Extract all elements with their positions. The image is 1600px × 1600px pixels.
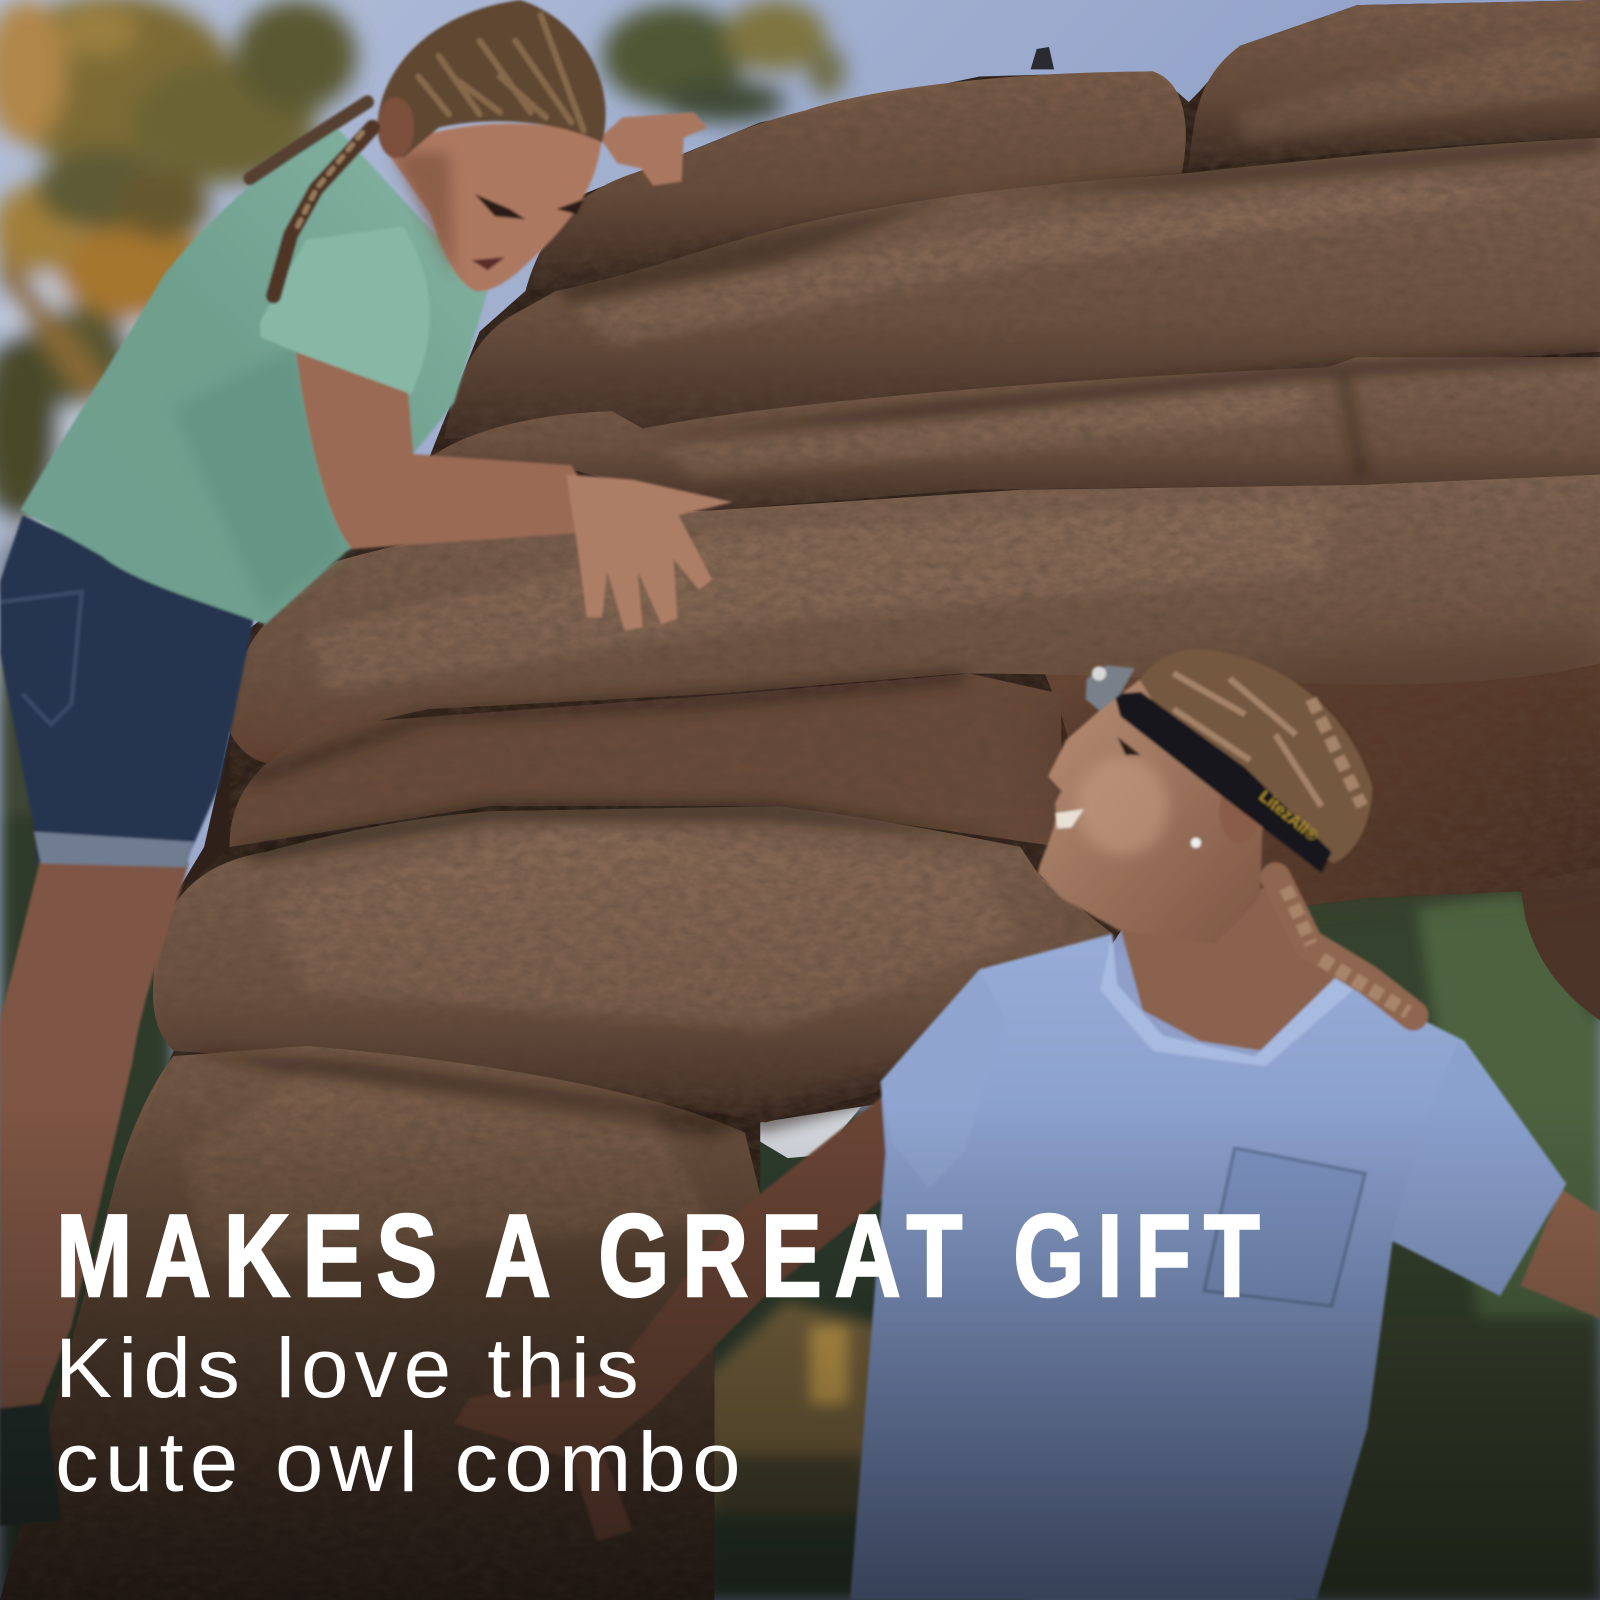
shoe <box>0 1403 61 1526</box>
headlamp <box>1086 665 1135 711</box>
shorts pocket seam <box>0 592 82 724</box>
warm shaded palm area <box>1041 633 1600 918</box>
heading: MAKES A GREAT GIFT <box>56 1190 1272 1321</box>
background: blurred house with warm light <box>704 1301 903 1515</box>
girl on the left climbing <box>0 0 733 1526</box>
braids <box>250 102 372 296</box>
ear <box>378 97 414 158</box>
hair highlights <box>418 15 584 131</box>
legs <box>0 857 189 1469</box>
fourth finger <box>227 474 1600 765</box>
small dark knob on top of the stone <box>1031 47 1054 69</box>
ear <box>1219 779 1260 844</box>
forearm and upper arm <box>296 352 612 549</box>
fifth finger <box>230 673 1061 847</box>
girl on the right wearing the headlamp <box>454 649 1600 1600</box>
shirt sleeve <box>260 227 430 396</box>
hand on stone <box>566 474 733 631</box>
hair <box>1140 649 1372 863</box>
near arm <box>1520 1189 1600 1318</box>
hair <box>378 0 606 158</box>
thumb base <box>0 1046 760 1600</box>
second finger <box>444 138 1600 439</box>
mint t-shirt <box>20 128 488 624</box>
stone grain texture <box>163 1 1600 1247</box>
stone shading <box>184 133 1600 1138</box>
bottom dark gradient <box>0 1102 1600 1600</box>
hand on top of stone <box>600 112 707 186</box>
face <box>1038 680 1263 944</box>
cheek highlight <box>1077 757 1168 855</box>
neck <box>1119 888 1337 1051</box>
third finger <box>429 357 1600 510</box>
background: blurred autumn trees <box>0 0 845 694</box>
far arm <box>454 1092 913 1541</box>
background: dark foliage behind kids <box>0 653 1600 1600</box>
chest pocket <box>1204 1148 1365 1306</box>
sky gap under the stone hand <box>737 1087 878 1158</box>
subheading line one: Kids love this <box>55 1320 645 1415</box>
subheading <box>55 1320 747 1509</box>
stone palm <box>1020 571 1600 929</box>
eyes, nose and mouth <box>471 194 584 270</box>
earring <box>1191 838 1201 848</box>
shirt shadow <box>173 347 347 612</box>
stone highlights <box>184 41 1600 1265</box>
face shading <box>393 153 454 276</box>
right sleeve <box>1390 1041 1566 1296</box>
black headband with product name <box>1114 692 1332 872</box>
t-shirt <box>850 934 1566 1600</box>
denim shorts <box>0 515 255 867</box>
black headband with product name: LitezAll® <box>1256 787 1321 845</box>
upper right finger <box>1189 0 1600 168</box>
braid strands <box>1173 673 1408 1012</box>
eye <box>1117 737 1141 755</box>
stone leg at right <box>1520 867 1600 1020</box>
left sleeve <box>881 969 1005 1189</box>
braid lower <box>1276 878 1413 1015</box>
subheading line two: cute owl combo <box>55 1414 747 1509</box>
smile <box>1055 809 1084 829</box>
shirt collar <box>1100 934 1359 1066</box>
face <box>388 124 602 291</box>
shorts hem <box>34 832 194 867</box>
sixth finger <box>153 806 1112 1122</box>
upper finger <box>526 71 1186 291</box>
